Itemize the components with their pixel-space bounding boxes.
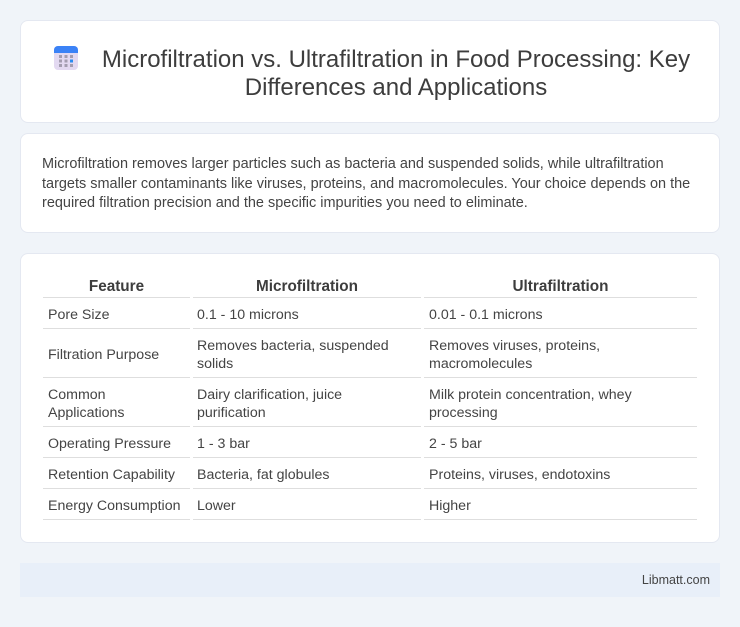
row: filtration purpose: Removes bacteria, suspended [197, 338, 389, 354]
intro text: targets smaller contaminants like viruses, proteins, and macromolecules. Your choice depends on the [42, 176, 690, 192]
row: filtration purpose: macromolecules [429, 356, 532, 372]
comparison table panel [20, 253, 720, 543]
row: energy consumption: Energy Consumption [48, 498, 180, 514]
title: Microfiltration vs. Ultrafiltration in Food Processing: Key [102, 46, 690, 73]
table header [89, 278, 609, 295]
row: retention capability: Retention Capability [48, 467, 175, 483]
row: pore size: 0.01 - 0.1 microns [429, 307, 543, 323]
row: common applications: Dairy clarification, juice [197, 387, 342, 403]
intro text: Microfiltration removes larger particles such as bacteria and suspended solids, while ultrafiltration [42, 156, 664, 172]
row: operating pressure: 2 - 5 bar [429, 436, 482, 452]
row: common applications: purification [197, 405, 266, 421]
row: common applications: Common [48, 387, 106, 403]
row: retention capability [48, 467, 610, 483]
table header: Ultrafiltration [512, 278, 609, 295]
row: common applications: Applications [48, 405, 125, 421]
row: operating pressure [48, 436, 482, 452]
row: filtration purpose: solids [197, 356, 233, 372]
row: operating pressure: Operating Pressure [48, 436, 171, 452]
row: filtration purpose: Filtration Purpose [48, 347, 159, 363]
row: retention capability: Proteins, viruses, endotoxins [429, 467, 610, 483]
header card [20, 20, 720, 123]
row: filtration purpose [48, 338, 600, 372]
footer bar [20, 563, 720, 597]
row: operating pressure: 1 - 3 bar [197, 436, 250, 452]
icon: calendar grid [54, 46, 78, 70]
table header: Feature [89, 278, 144, 295]
row: retention capability: Bacteria, fat globules [197, 467, 330, 483]
intro text [42, 156, 690, 211]
intro text: required filtration precision and the specific impurities you need to eliminate. [42, 195, 528, 211]
title: Differences and Applications [245, 74, 547, 101]
title [102, 46, 690, 101]
row: common applications: Milk protein concentration, whey [429, 387, 632, 403]
intro panel [20, 133, 720, 233]
row: pore size: Pore Size [48, 307, 110, 323]
row: filtration purpose: Removes viruses, proteins, [429, 338, 600, 354]
row: energy consumption: Higher [429, 498, 471, 514]
row: common applications: processing [429, 405, 498, 421]
row: energy consumption [48, 498, 471, 514]
row: pore size: 0.1 - 10 microns [197, 307, 299, 323]
footer credit: Libmatt.com [642, 573, 710, 587]
row: energy consumption: Lower [197, 498, 236, 514]
row: pore size [48, 307, 543, 323]
row: common applications [48, 387, 632, 421]
table header: Microfiltration [256, 278, 358, 295]
